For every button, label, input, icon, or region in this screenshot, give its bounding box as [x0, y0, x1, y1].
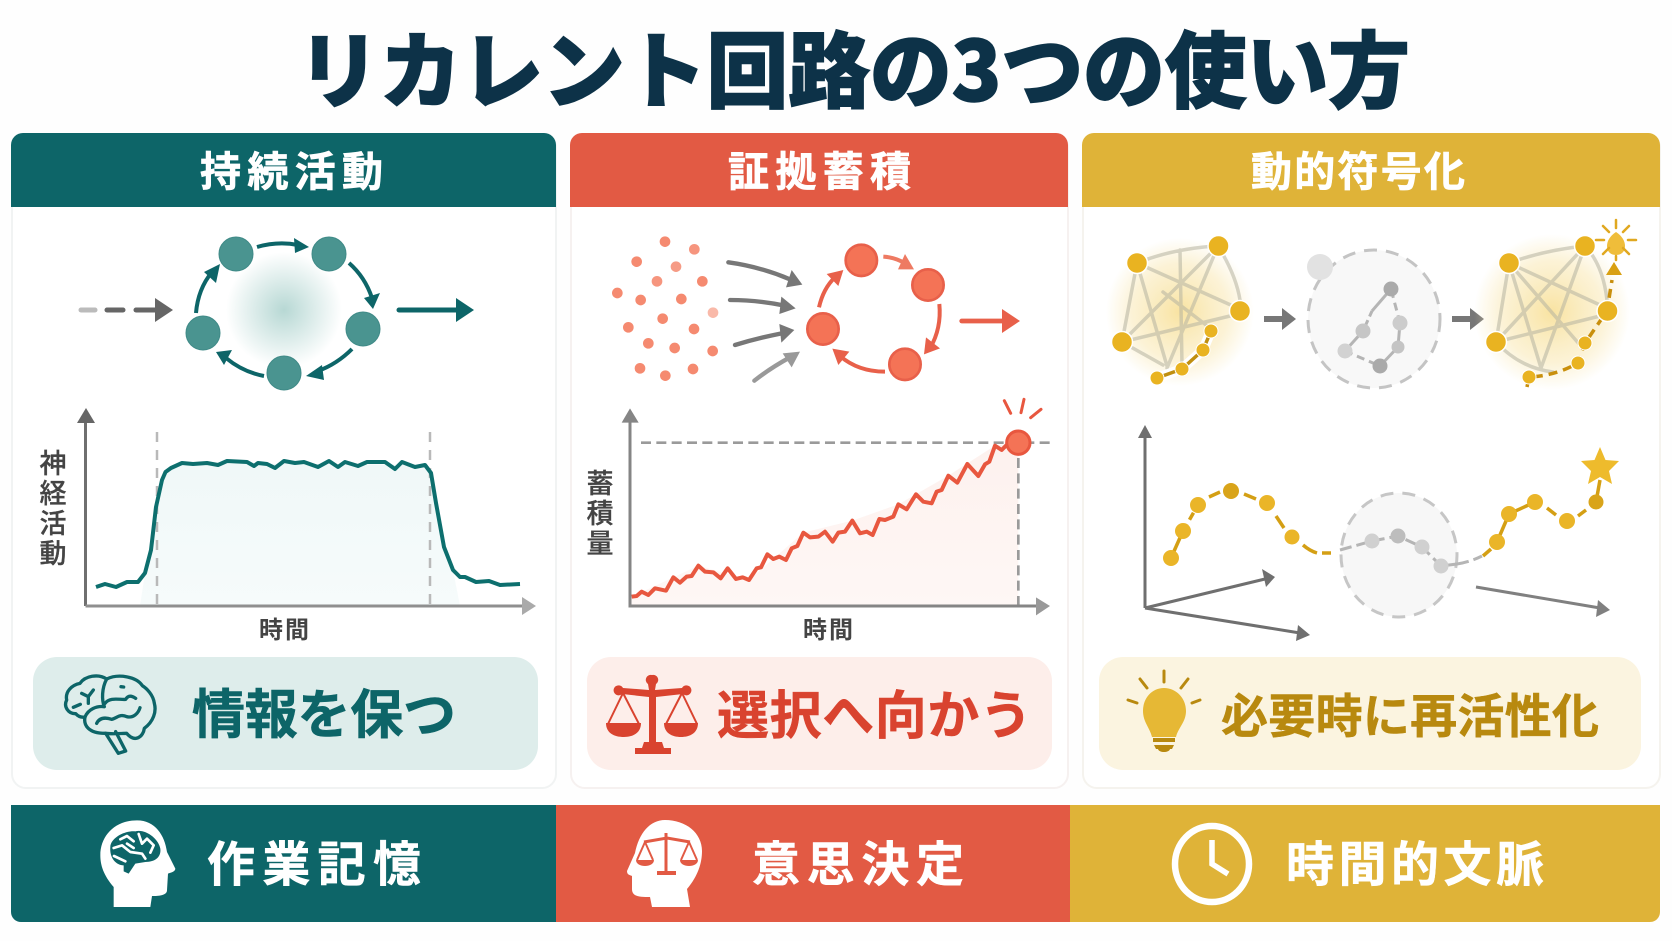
- panel: 持続活動: [11, 133, 556, 788]
- bottom band: 作業記憶: [11, 805, 556, 922]
- x axis label: 時間: [803, 617, 853, 644]
- callout pill: 情報を保つ: [33, 657, 538, 770]
- panel: 動的符号化: [1082, 133, 1660, 788]
- icon: light bulb: [1128, 671, 1200, 752]
- header text: 持続活動: 持続活動: [200, 149, 383, 195]
- header text: 動的符号化: 動的符号化: [1251, 149, 1465, 195]
- network: dormant memory: [1307, 250, 1440, 388]
- trajectory chart: [1138, 425, 1619, 641]
- arrow: [1264, 308, 1296, 330]
- y axis label: 活: [40, 509, 66, 539]
- output arrow: [962, 309, 1020, 333]
- output arrow: [399, 298, 474, 322]
- input arrow: [81, 298, 173, 322]
- network: reactivated: [1474, 220, 1636, 390]
- recurrent ring diagram: [186, 237, 380, 390]
- bottom band: 時間的文脈: [1070, 805, 1660, 922]
- callout pill: 必要時に再活性化: [1099, 657, 1641, 770]
- callout pill: 選択へ向かう: [587, 657, 1052, 770]
- panel header: 動的符号化: [1082, 133, 1660, 207]
- y axis label: 積: [586, 499, 614, 529]
- band text: 意思決定: [752, 839, 964, 892]
- icon: clock: [1175, 826, 1249, 902]
- converging grey arrows: [728, 262, 802, 381]
- icon: brain: [66, 676, 155, 753]
- arrow: [1452, 308, 1484, 330]
- icon: star: [1581, 447, 1619, 484]
- icon: head with brain: [100, 820, 175, 907]
- icon: head with scale: [627, 820, 702, 907]
- line chart: 神経活動: [40, 408, 536, 644]
- pill text: 選択へ向かう: [717, 688, 1032, 746]
- pill text: 情報を保つ: [192, 686, 456, 745]
- panel header: 持続活動: [11, 133, 556, 207]
- x axis label: 時間: [259, 617, 309, 644]
- y axis label: 量: [586, 529, 614, 559]
- line chart: 蓄積量: [586, 399, 1051, 644]
- y axis label: 神: [40, 449, 66, 479]
- header text: 証拠蓄積: 証拠蓄積: [728, 149, 911, 195]
- icon: balance scale: [606, 675, 698, 754]
- icon: memory spark: [1596, 220, 1636, 260]
- panel header: 証拠蓄積: [570, 133, 1068, 207]
- evidence dots: [612, 236, 718, 381]
- recurrent ring: [807, 245, 944, 380]
- band text: 時間的文脈: [1286, 839, 1544, 892]
- y axis label: 動: [40, 539, 66, 569]
- y axis label: 経: [40, 479, 66, 509]
- network: encoding: [1106, 236, 1254, 386]
- bottom band: 意思決定: [556, 805, 1070, 922]
- pill text: 必要時に再活性化: [1221, 690, 1599, 743]
- band text: 作業記憶: [207, 839, 421, 892]
- panel: 証拠蓄積: [570, 133, 1068, 788]
- y axis label: 蓄: [586, 469, 614, 499]
- title: リカレント回路の3つの使い方: [298, 5, 1410, 125]
